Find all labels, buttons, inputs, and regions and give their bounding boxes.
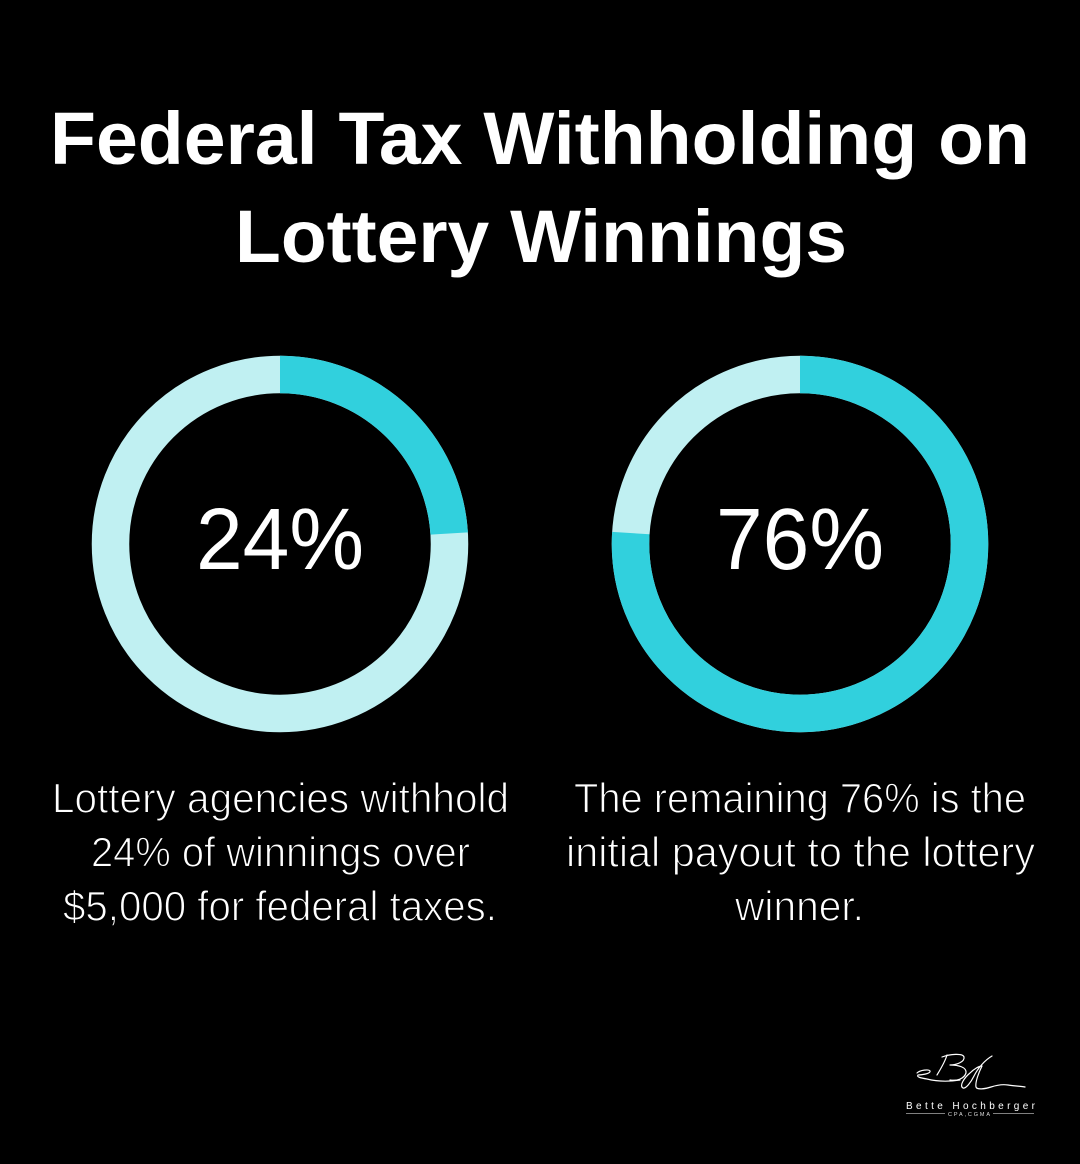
logo name: Bette Hochberger bbox=[906, 1101, 1036, 1112]
description: 24%: $5,000 for federal taxes. bbox=[63, 882, 497, 930]
value: 76%: 76% bbox=[716, 491, 884, 588]
donut chart: 24% bbox=[110, 374, 450, 714]
description: 24%: Lottery agencies withhold bbox=[52, 774, 509, 822]
donut chart: 76% bbox=[630, 374, 970, 714]
title: Lottery Winnings bbox=[235, 195, 847, 278]
title: Federal Tax Withholding on bbox=[50, 97, 1030, 180]
description: 76%: winner. bbox=[734, 882, 864, 930]
value: 24%: 24% bbox=[196, 491, 364, 588]
logo credentials: CPA,CGMA bbox=[948, 1112, 990, 1118]
panel: 76% payout bbox=[566, 374, 1035, 930]
panel: 24% withheld bbox=[52, 374, 509, 930]
title bbox=[50, 97, 1030, 278]
logo: Bette Hochberger CPA, CGMA bbox=[906, 1054, 1036, 1118]
description: 24%: 24% of winnings over bbox=[91, 828, 470, 876]
description: 76%: initial payout to the lottery bbox=[566, 828, 1035, 876]
description: 76%: The remaining 76% is the bbox=[574, 774, 1026, 822]
icon: BH signature bbox=[917, 1054, 1025, 1089]
description: 76% bbox=[566, 774, 1035, 930]
description: 24% bbox=[52, 774, 509, 930]
